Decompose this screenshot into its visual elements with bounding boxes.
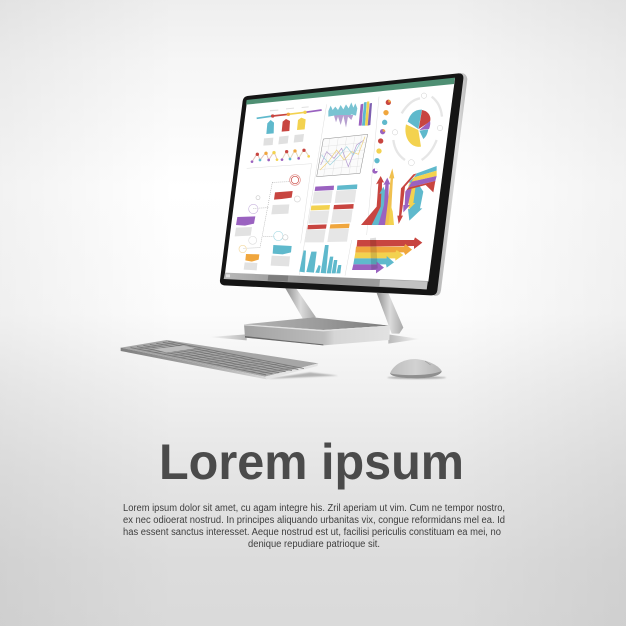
horizontal arrows graphic — [352, 237, 422, 273]
description text — [123, 503, 505, 550]
monitor silver edge — [434, 73, 467, 296]
title: Lorem ipsum — [159, 434, 464, 490]
teal column chart — [299, 245, 341, 273]
description text: has essent sanctus interesset. Aeque nostrud est ut, facilisi periculis constituam ea mei, no — [123, 527, 501, 538]
colored bullet icons — [372, 100, 391, 174]
info cards grid — [305, 184, 357, 242]
top green bar — [246, 78, 455, 105]
keyboard — [121, 340, 318, 379]
line chart — [317, 134, 368, 177]
keyboard shadow — [267, 372, 338, 379]
monitor stand legs — [285, 288, 403, 334]
pie chart with ring — [392, 93, 443, 166]
description text: Lorem ipsum dolor sit amet, cu agam integre his. Zril aperiam ut vim. Cum ne tempor nostro, — [123, 503, 505, 514]
screen — [224, 78, 455, 289]
mouse shadow — [387, 376, 446, 379]
monitor — [220, 73, 467, 296]
timeline — [257, 106, 322, 146]
description text: ex nec odioerat nostrud. In principes aliquando urbanitas vix, congue reformidans mel ea. Id — [123, 515, 505, 526]
monitor base — [244, 317, 390, 345]
dividers — [247, 97, 379, 276]
rainbow bar chart — [359, 101, 372, 126]
mouse — [390, 359, 442, 378]
monitor black frame — [220, 73, 463, 295]
rising arrows graphic — [361, 168, 394, 225]
turning arrows graphic — [397, 166, 437, 224]
small icon chain — [251, 149, 310, 163]
description text: denique repudiare patrioque sit. — [248, 539, 380, 550]
area chart — [328, 102, 357, 128]
flow chart — [235, 175, 300, 270]
base shadow — [208, 334, 420, 344]
desk hardware — [121, 288, 446, 379]
bottom task bar — [224, 273, 428, 289]
